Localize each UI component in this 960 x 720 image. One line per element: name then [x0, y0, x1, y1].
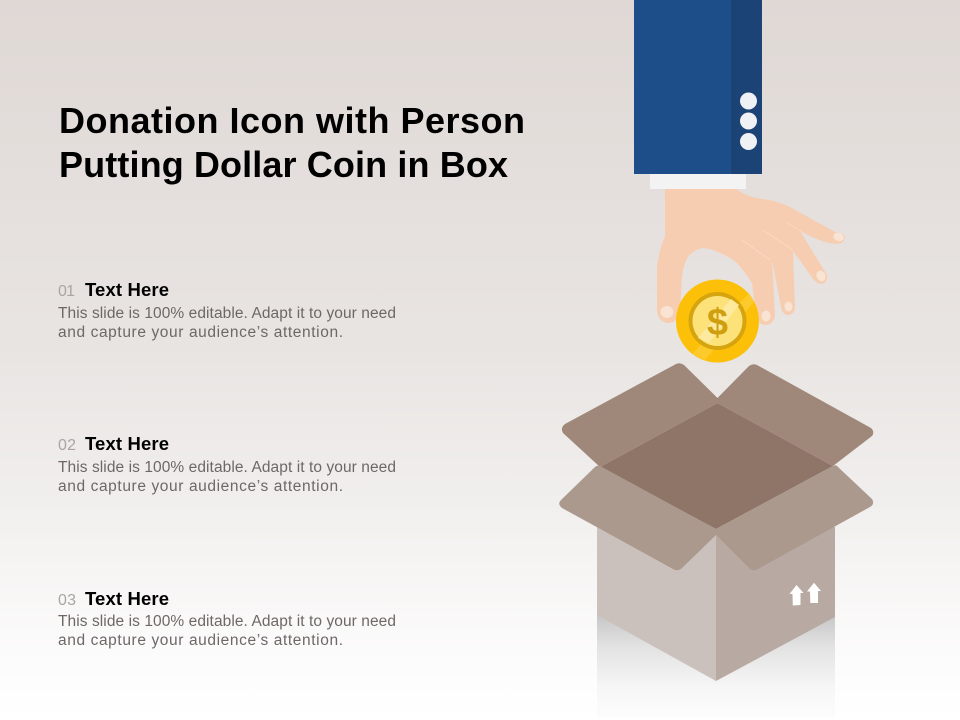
back right flap: [718, 364, 873, 466]
hand: [657, 189, 845, 325]
title: [59, 100, 525, 185]
text block 01: and capture your audience’s attention.: [58, 324, 343, 341]
text block 03: Text Here: [85, 588, 169, 609]
text block 02: 02: [58, 437, 76, 454]
finger creases: [742, 223, 802, 260]
title: Donation Icon with Person: [59, 100, 525, 141]
sleeve: [634, 0, 762, 174]
handling arrows: [790, 583, 821, 606]
text block 01: [58, 279, 396, 341]
text block 03: This slide is 100% editable. Adapt it to your need: [58, 613, 396, 630]
cuff buttons: [740, 92, 757, 150]
back left flap: [562, 363, 718, 467]
title: Putting Dollar Coin in Box: [59, 144, 508, 185]
text block 02: [58, 433, 396, 495]
icon: dollar coin: [676, 280, 759, 362]
text block 03: 03: [58, 592, 76, 609]
text block 02: Text Here: [85, 433, 169, 454]
box left face: [597, 527, 716, 681]
text block 03: [58, 588, 396, 649]
text block 03: and capture your audience’s attention.: [58, 632, 343, 649]
icon: dollar coin: $: [707, 302, 728, 344]
icon: open cardboard box: [559, 363, 873, 718]
shirt cuff: [650, 174, 746, 189]
icon: hand in suit sleeve: [634, 0, 845, 325]
text block 01: Text Here: [85, 279, 169, 300]
text block 01: This slide is 100% editable. Adapt it to your need: [58, 305, 396, 322]
front left flap: [559, 466, 716, 570]
box right face: [716, 527, 835, 681]
box interior: [600, 403, 833, 529]
sleeve cuff: [731, 0, 762, 174]
text block 01: 01: [58, 283, 75, 300]
finger nails: [660, 231, 845, 322]
text block 02: and capture your audience’s attention.: [58, 478, 343, 495]
front right flap: [716, 465, 873, 570]
box reflection: [597, 615, 835, 718]
text block 02: This slide is 100% editable. Adapt it to your need: [58, 459, 396, 476]
